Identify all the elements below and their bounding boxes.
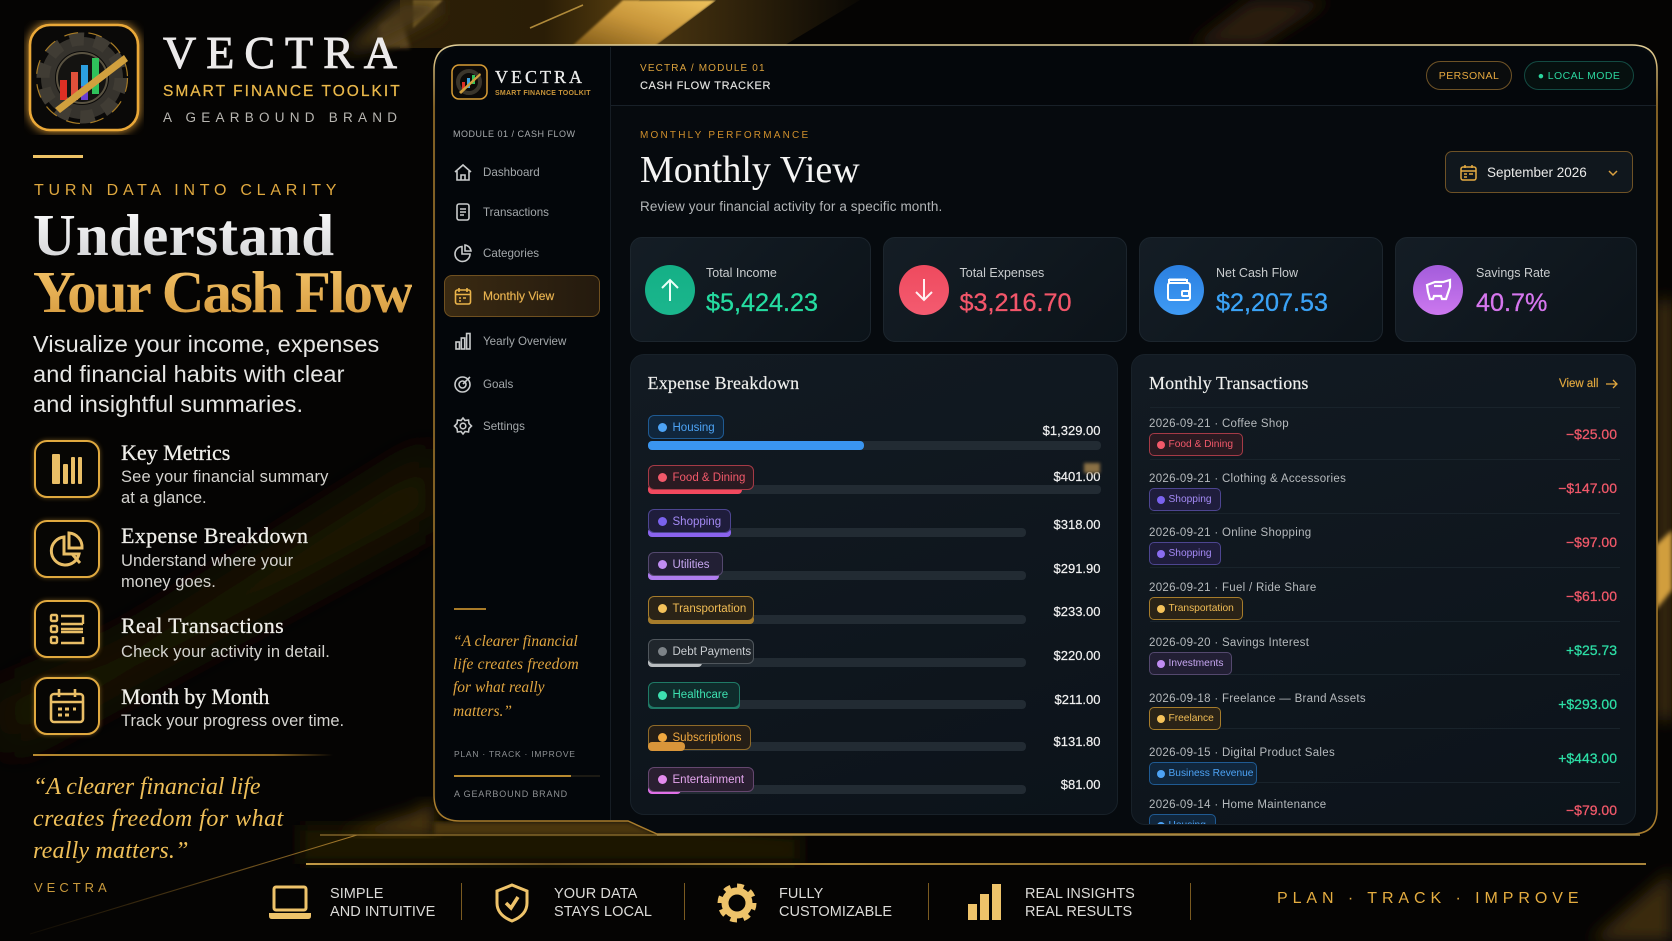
icon: piggy bank [1413, 265, 1463, 315]
footer: fully customizable [717, 883, 897, 921]
row: healthcare [648, 682, 1100, 709]
page subtitle: Review your financial activity for a specific month. [640, 199, 942, 214]
footer divider [461, 883, 462, 920]
sidebar brand note: A GEARBOUND BRAND [454, 789, 568, 799]
text [554, 885, 652, 921]
sidebar tagline: SMART FINANCE TOOLKIT [495, 90, 591, 97]
icon: list [34, 600, 100, 658]
sidebar quote: for what really [453, 679, 545, 696]
nav: yearly overview: Yearly Overview [483, 335, 566, 348]
icon: arrow [1606, 380, 1618, 388]
total income value: $5,424.23 [706, 288, 818, 316]
icon: expense down arrow [899, 265, 949, 315]
sidebar section label: MODULE 01 / CASH FLOW [453, 129, 576, 139]
intro paragraph [33, 331, 379, 417]
footer: simple and intuitive [269, 886, 435, 920]
description: Check your activity in detail. [121, 643, 330, 661]
gold rule [33, 754, 333, 756]
module title: CASH FLOW TRACKER [640, 80, 771, 92]
row: housing: Housing [672, 422, 715, 434]
transaction: clothing [1149, 473, 1617, 511]
text: REAL INSIGHTS [1025, 886, 1135, 902]
row: entertainment: $81.00 [1061, 777, 1100, 792]
icon: bars [968, 883, 1002, 920]
panel title: Expense Breakdown [648, 373, 799, 393]
transaction: savings interest: Investments [1168, 658, 1223, 669]
short gold divider [33, 155, 83, 158]
icon: metric bars [34, 440, 100, 498]
sidebar short rule [454, 608, 486, 610]
card background: total expenses [883, 237, 1127, 342]
nav: goals: Goals [483, 378, 513, 391]
card background: net cash flow [1139, 237, 1383, 342]
top bar [611, 47, 1656, 106]
breadcrumb: VECTRA / MODULE 01 [640, 62, 766, 74]
icon: wallet [1154, 265, 1204, 315]
local mode badge [1524, 61, 1634, 90]
transaction: home maintenance [1149, 799, 1617, 825]
chevron [1608, 170, 1618, 176]
description line 2: at a glance. [121, 489, 207, 507]
icon: pie [34, 520, 100, 578]
footer divider [684, 883, 685, 920]
nav: settings: Settings [483, 420, 525, 433]
transaction: savings interest [1149, 637, 1617, 675]
text: CUSTOMIZABLE [779, 904, 892, 920]
transaction: freelance: 2026-09-18 · Freelance — Brand Assets [1149, 693, 1366, 705]
row: food and dining: $401.00 [1054, 469, 1100, 484]
local mode badge: ● LOCAL MODE [1538, 70, 1620, 82]
transaction: online shopping [1149, 527, 1617, 565]
section eyebrow: MONTHLY PERFORMANCE [640, 130, 810, 140]
footer: your data stays local [494, 883, 664, 921]
transaction: coffee shop: 2026-09-21 · Coffee Shop [1149, 418, 1289, 430]
sidebar quote [453, 633, 579, 720]
total expenses label: Total Expenses [960, 266, 1044, 280]
row: healthcare: $211.00 [1054, 692, 1100, 707]
nav: active highlight [444, 275, 600, 317]
selected month: September 2026 [1487, 165, 1587, 180]
title: Month by Month [121, 684, 269, 709]
text: FULLY [779, 886, 823, 902]
text [330, 886, 435, 920]
nav: monthly view: Monthly View [483, 289, 554, 303]
personal badge: PERSONAL [1439, 70, 1499, 82]
headline [33, 202, 412, 325]
icon: target [454, 376, 471, 393]
row: utilities: $291.90 [1054, 561, 1100, 576]
row: shopping [648, 509, 1100, 537]
nav: dashboard: Dashboard [483, 166, 540, 179]
transaction: online shopping: Shopping [1168, 548, 1212, 559]
sidebar [436, 47, 611, 820]
transaction: online shopping: 2026-09-21 · Online Shopping [1149, 527, 1311, 539]
row: food and dining: Food & Dining [672, 472, 745, 484]
intro paragraph: and insightful summaries. [33, 391, 303, 417]
quote: really matters.” [33, 838, 189, 864]
panel: monthly transactions [1131, 354, 1636, 825]
savings rate value: 40.7% [1476, 288, 1547, 316]
quote: “A clearer financial life [33, 774, 260, 800]
row: subscriptions: Subscriptions [672, 732, 742, 744]
transaction: clothing: 2026-09-21 · Clothing & Accessories [1149, 473, 1346, 485]
sidebar quote: matters.” [453, 703, 512, 720]
transaction: fuel [1149, 582, 1617, 620]
text: SIMPLE [330, 886, 384, 902]
total income label: Total Income [706, 266, 777, 280]
feature: month by month [31, 674, 344, 738]
card background: savings rate [1395, 237, 1637, 342]
description: Understand where your [121, 552, 293, 570]
feature: key metrics [31, 437, 328, 507]
icon: shield [494, 883, 530, 923]
description line 2: money goes. [121, 572, 216, 590]
brand tagline: SMART FINANCE TOOLKIT [163, 83, 402, 100]
nav: categories: Categories [483, 247, 539, 260]
title: Key Metrics [121, 440, 230, 465]
transaction: clothing: −$147.00 [1558, 480, 1617, 496]
row: subscriptions: $131.80 [1054, 734, 1100, 749]
icon: income up arrow [645, 265, 695, 315]
transaction: savings interest: 2026-09-20 · Savings Interest [1149, 637, 1309, 649]
sidebar quote: “A clearer financial [453, 633, 578, 650]
row: food and dining [648, 465, 1101, 494]
total expenses value: $3,216.70 [960, 288, 1072, 316]
title: Expense Breakdown [121, 523, 308, 548]
row: transportation: $233.00 [1054, 604, 1100, 619]
sidebar motto: PLAN · TRACK · IMPROVE [454, 749, 576, 759]
footer motto: PLAN · TRACK · IMPROVE [1277, 890, 1583, 907]
icon: home [454, 164, 472, 181]
row: debt payments [648, 639, 1100, 667]
sidebar logo [451, 64, 488, 100]
transaction: savings interest: +$25.73 [1566, 642, 1617, 658]
text [779, 885, 892, 921]
transaction: fuel: −$61.00 [1566, 588, 1617, 604]
row: utilities [648, 552, 1100, 580]
transaction: digital sales: 2026-09-15 · Digital Product Sales [1149, 747, 1335, 759]
row: housing: $1,329.00 [1043, 423, 1100, 438]
row: debt payments: Debt Payments [672, 646, 751, 658]
footer: real insights [968, 883, 1138, 921]
footer divider [928, 883, 929, 920]
brand logo [24, 20, 144, 135]
transaction: freelance [1149, 693, 1617, 730]
row: entertainment [648, 767, 1100, 794]
sidebar rule [454, 775, 600, 776]
text [1025, 885, 1135, 921]
month selector [1445, 151, 1633, 193]
row: entertainment: Entertainment [672, 774, 744, 786]
feature: expense breakdown [31, 517, 308, 590]
row: transportation: Transportation [672, 603, 746, 615]
transaction: digital sales: +$443.00 [1558, 750, 1617, 766]
card background: total income [630, 237, 871, 342]
icon: settings gear [454, 416, 472, 436]
row: housing [648, 415, 1101, 450]
sidebar quote: life creates freedom [453, 656, 579, 673]
headline: Understand [33, 202, 334, 268]
brand wordmark: VECTRA [163, 27, 407, 78]
text: AND INTUITIVE [330, 904, 435, 920]
view all link: View all [1559, 378, 1598, 390]
row: utilities: Utilities [672, 559, 710, 571]
transaction: coffee shop [1149, 418, 1617, 456]
brand sub tagline: A GEARBOUND BRAND [163, 110, 402, 125]
text: YOUR DATA [554, 886, 637, 902]
row: shopping: $318.00 [1054, 517, 1100, 532]
savings rate label: Savings Rate [1476, 266, 1550, 280]
transaction: digital sales: Business Revenue [1168, 768, 1253, 779]
row: healthcare: Healthcare [672, 689, 728, 701]
transaction: digital sales [1149, 747, 1617, 785]
footer divider [1190, 883, 1191, 920]
personal badge [1426, 61, 1512, 90]
eyebrow: TURN DATA INTO CLARITY [34, 182, 341, 199]
icon: document [456, 203, 470, 221]
sidebar brand: VECTRA [495, 67, 585, 87]
row: subscriptions [648, 725, 1100, 751]
intro paragraph: Visualize your income, expenses [33, 331, 379, 357]
footer gold rule [306, 863, 1646, 865]
nav: transactions: Transactions [483, 206, 549, 219]
transaction: freelance: +$293.00 [1558, 696, 1617, 712]
icon: calendar [34, 677, 100, 735]
page title: Monthly View [640, 149, 860, 191]
description: Track your progress over time. [121, 712, 344, 730]
icon: pie [454, 244, 472, 262]
transaction: fuel: Transportation [1168, 603, 1234, 614]
text: REAL RESULTS [1025, 904, 1132, 920]
quote: creates freedom for what [33, 806, 284, 832]
title: Real Transactions [121, 613, 284, 638]
row: debt payments: $220.00 [1054, 648, 1100, 663]
transaction: home maintenance: 2026-09-14 · Home Maintenance [1149, 799, 1326, 811]
panel: expense breakdown [630, 354, 1118, 815]
net cash flow value: $2,207.53 [1216, 288, 1328, 316]
icon: calendar [1460, 165, 1477, 181]
transaction: online shopping: −$97.00 [1566, 534, 1617, 550]
transaction: coffee shop: −$25.00 [1566, 426, 1617, 442]
headline: Your Cash Flow [33, 259, 412, 325]
transaction: clothing: Shopping [1168, 494, 1212, 505]
icon: gear [717, 883, 757, 923]
gold speck near food and dining amount [1084, 463, 1100, 473]
description: See your financial summary [121, 468, 328, 486]
intro paragraph: and financial habits with clear [33, 361, 345, 387]
icon: calendar active [454, 288, 472, 305]
row: shopping: Shopping [672, 516, 721, 528]
transaction: coffee shop: Food & Dining [1168, 439, 1233, 450]
text: STAYS LOCAL [554, 904, 652, 920]
transaction: freelance: Freelance [1168, 713, 1214, 724]
transaction: home maintenance: −$79.00 [1566, 802, 1617, 818]
row: transportation [648, 596, 1100, 624]
panel title: Monthly Transactions [1149, 373, 1309, 393]
transaction: fuel: 2026-09-21 · Fuel / Ride Share [1149, 582, 1317, 594]
icon: laptop [269, 886, 311, 919]
feature: real transactions [31, 597, 330, 661]
quote [33, 774, 284, 864]
icon: yearly bars [455, 332, 471, 350]
quote attribution: VECTRA [34, 880, 111, 895]
net cash flow label: Net Cash Flow [1216, 266, 1298, 280]
